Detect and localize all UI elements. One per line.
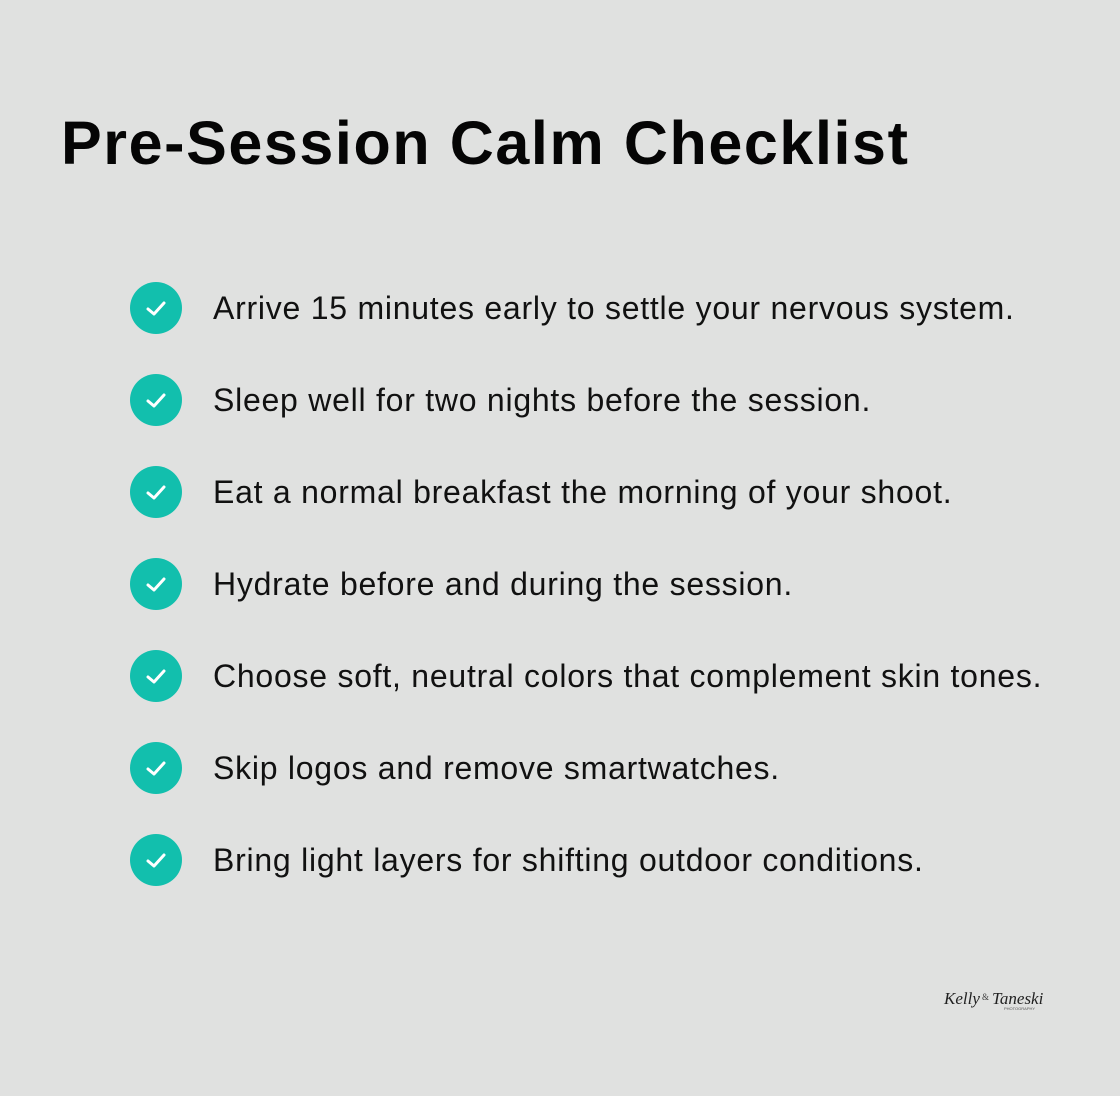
checklist item 5 (130, 650, 1042, 702)
checklist item 6: Skip logos and remove smartwatches. (213, 750, 780, 786)
checklist item 7: Bring light layers for shifting outdoor conditions. (213, 842, 924, 878)
logo signature: & (982, 992, 989, 1002)
checklist item 1: Arrive 15 minutes early to settle your nervous system. (213, 290, 1015, 326)
checklist item 4 (130, 558, 793, 610)
icon: check (130, 650, 182, 702)
checklist item 5: Choose soft, neutral colors that complement skin tones. (213, 658, 1042, 694)
logo signature: PHOTOGRAPHY (1004, 1006, 1035, 1011)
title: Pre-Session Calm Checklist (61, 109, 909, 177)
checklist item 3 (130, 466, 952, 518)
icon: check (130, 282, 182, 334)
checklist item 3: Eat a normal breakfast the morning of your shoot. (213, 474, 952, 510)
icon: check (130, 834, 182, 886)
icon: check (130, 466, 182, 518)
checklist item 1 (130, 282, 1015, 334)
checklist item 6 (130, 742, 780, 794)
checklist item 2: Sleep well for two nights before the session. (213, 382, 871, 418)
logo signature: Kelly (943, 989, 980, 1008)
icon: check (130, 742, 182, 794)
icon: check (130, 558, 182, 610)
checklist item 4: Hydrate before and during the session. (213, 566, 793, 602)
logo signature: Taneski (992, 989, 1044, 1008)
checklist item 7 (130, 834, 924, 886)
logo signature (943, 989, 1044, 1011)
icon: check (130, 374, 182, 426)
checklist item 2 (130, 374, 871, 426)
